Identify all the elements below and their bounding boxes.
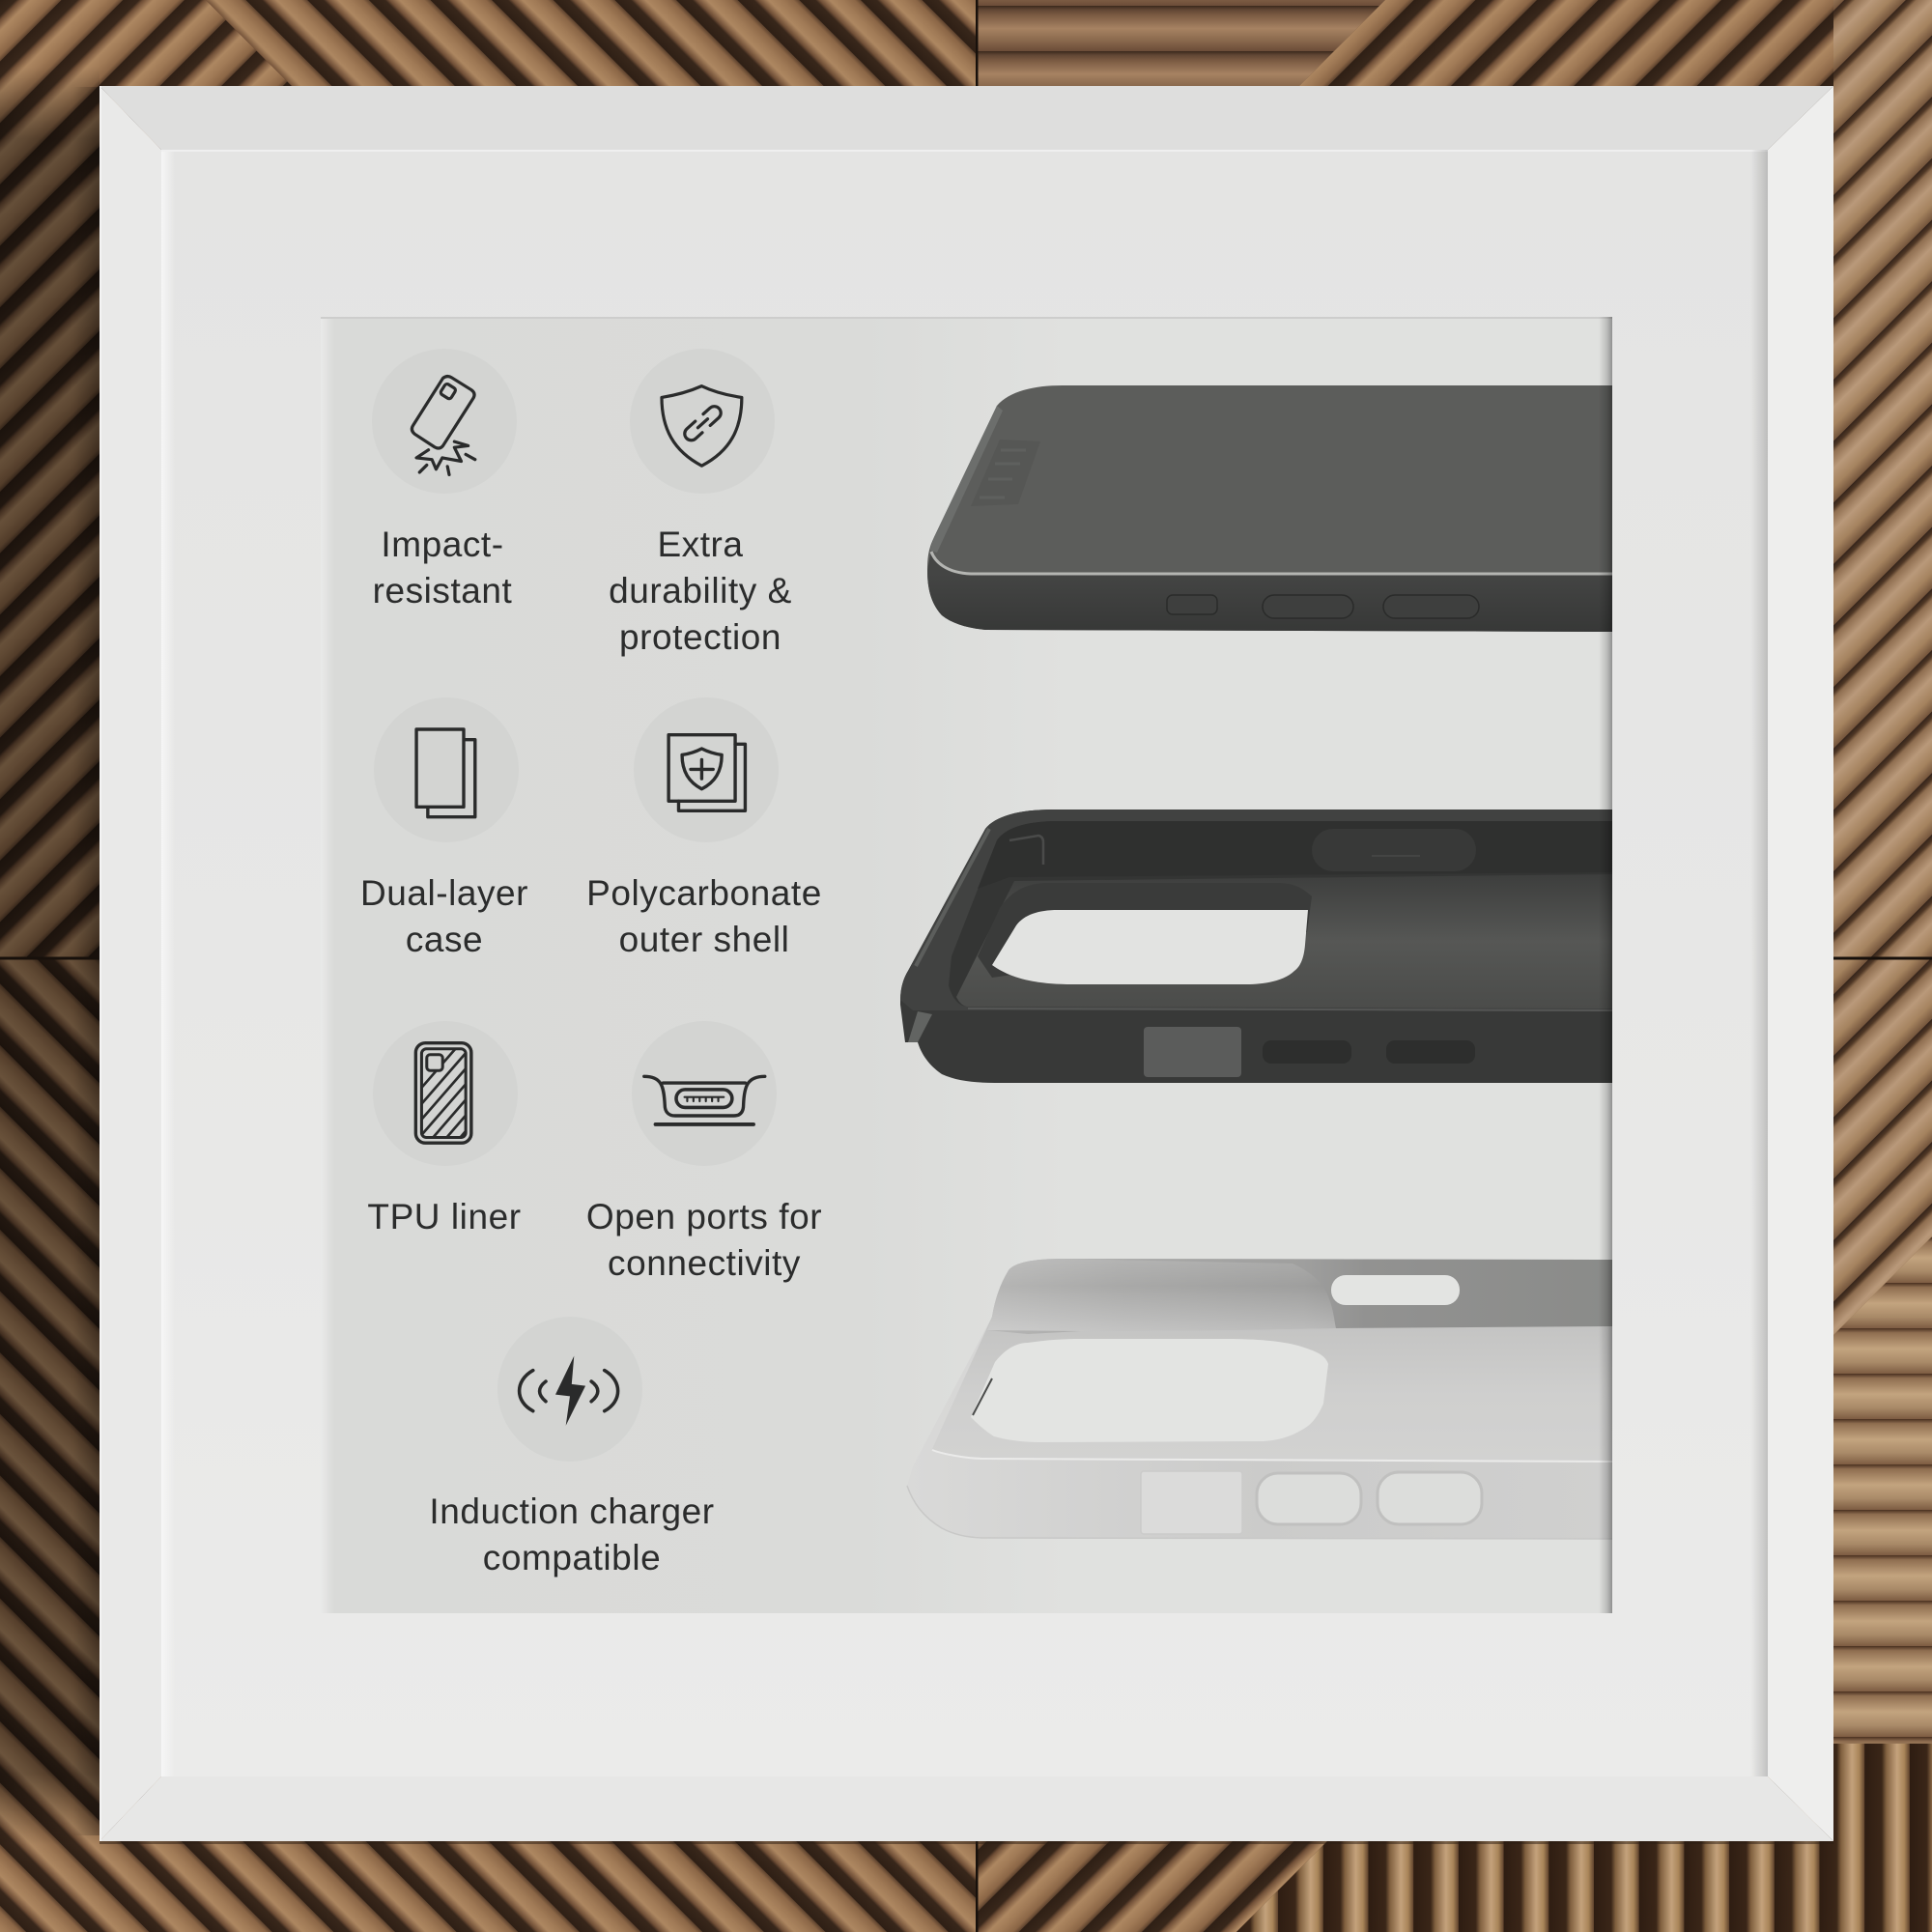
feature: extra durability [609,349,792,657]
label: Polycarbonate outer shell: outer shell [619,920,789,959]
icon: USB-C port [632,1021,777,1166]
label: Impact-resistant: resistant [373,571,513,611]
icon: shield on stacked sheets [634,697,779,842]
phone case: outer shell front view [927,385,1612,632]
label: Extra durability & protection: Extra [657,525,744,564]
phone case: polycarbonate shell interior [900,810,1612,1083]
label: Open ports for connectivity: Open ports for [586,1197,822,1236]
label: Impact-resistant: Impact- [381,525,504,564]
label: Open ports for connectivity: connectivity [608,1243,801,1283]
icon: dropped phone [372,349,517,494]
feature: impact-resistant [372,349,517,611]
label: TPU liner: TPU liner [367,1197,522,1236]
icon: shield with chain link [630,349,775,494]
label: Induction charger compatible: Induction charger [429,1492,715,1531]
artwork window panel [321,317,1612,1613]
label: Polycarbonate outer shell: Polycarbonate [586,873,822,913]
feature: polycarbonate outer shell [586,697,822,959]
label: Extra durability & protection: protection [619,617,781,657]
feature: dual-layer case [360,697,528,959]
window right-edge shadow [1599,317,1612,1613]
phone case: TPU liner [907,1259,1612,1539]
mat board [161,150,1768,1776]
icon: two stacked layers [374,697,519,842]
label: Induction charger compatible: compatible [483,1538,661,1577]
icon: striped phone liner [413,1041,473,1145]
label: Dual-layer case: Dual-layer [360,873,528,913]
feature: open ports [586,1021,822,1283]
label: Extra durability & protection: durability & [609,571,792,611]
icon: wireless charging bolt [497,1317,642,1462]
label: Dual-layer case: case [406,920,483,959]
feature: induction charger [429,1317,715,1577]
feature: TPU liner [368,1041,520,1229]
